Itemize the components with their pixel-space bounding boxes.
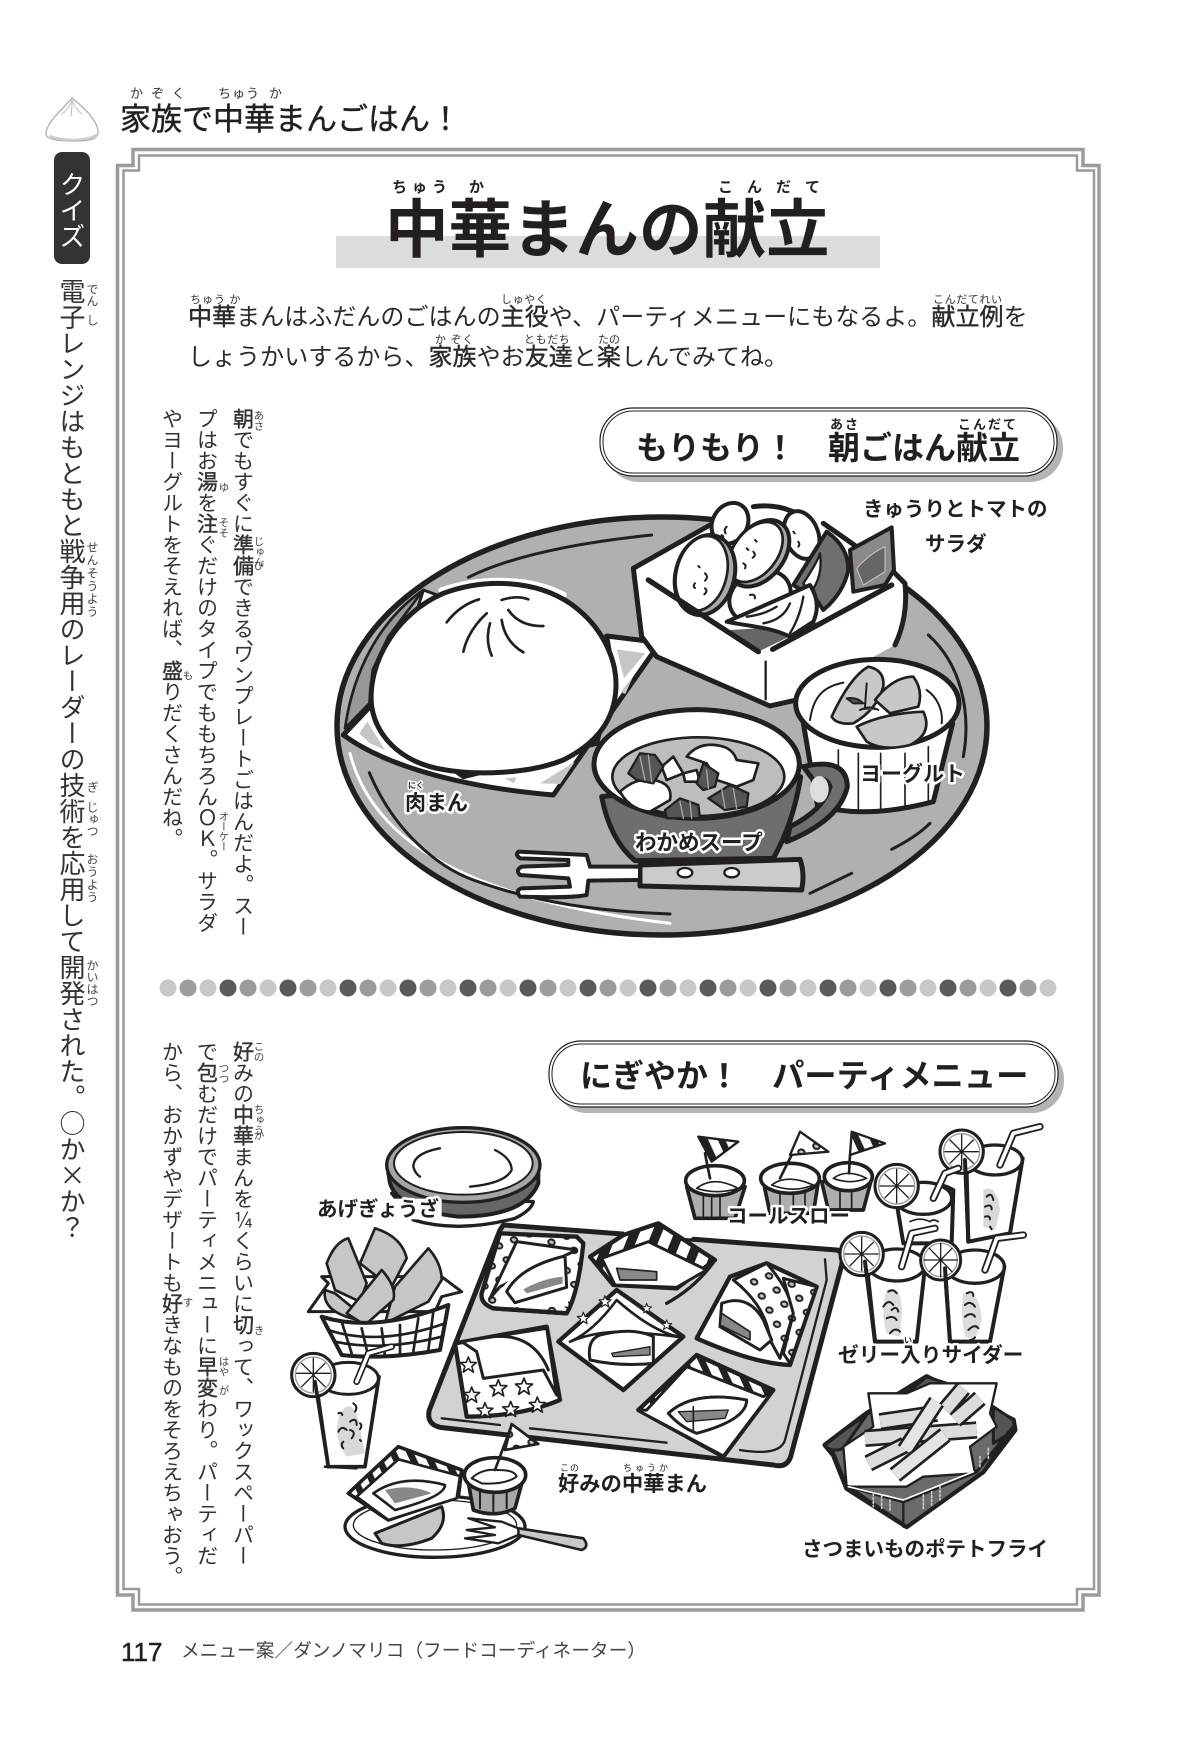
heading pill: party menu [549, 1041, 1064, 1113]
breakfast vertical text: オーケー [216, 811, 232, 851]
breakfast heading: こんだて [958, 414, 1018, 433]
intro text: しょうかいするから、家族やお友達と楽しんでみてね。 [188, 337, 788, 372]
dotted divider [160, 980, 1056, 996]
party vertical text: つつ [216, 1063, 232, 1084]
credit: メニュー案／ダンノマリコ（フードコーディネーター） [181, 1636, 646, 1663]
wrap D stars [558, 1290, 683, 1390]
party vertical text: き [252, 1325, 266, 1336]
breakfast vertical text: び [252, 560, 266, 570]
labels on plate: 肉まん [405, 787, 468, 817]
quiz vertical text: じゅつ [84, 801, 101, 837]
page number: 117 [121, 1637, 162, 1667]
party vertical text: この [252, 1041, 266, 1062]
illustration: party table: この [560, 1461, 580, 1474]
tray with wrapped buns [429, 1223, 842, 1466]
sweet potato fries basket [825, 1377, 1015, 1527]
running heading: かぞく [130, 83, 193, 102]
illustration: party table: ちゅうか [623, 1461, 671, 1474]
illustration: party table: 好みの中華まん [558, 1467, 707, 1498]
quiz vertical text: ぎ [84, 781, 101, 793]
running heading: 家族で中華まんごはん！ [120, 94, 461, 139]
illustration: breakfast plate: ヨーグルト [860, 758, 965, 788]
breakfast vertical text: やヨーグルトをそえれば、 盛 りだくさんだね。 [158, 408, 188, 849]
illustration: breakfast plate [337, 492, 1048, 935]
illustration: breakfast plate: わかめスープ [635, 826, 763, 857]
stacked plates and fried gyoza [308, 1128, 540, 1357]
main title: 中華まんの献立 [385, 179, 830, 271]
party vertical text: から、おかずやデザートも 好 きなものをそろえちゃおう。 [158, 1041, 188, 1587]
breakfast heading: もりもり！ [636, 423, 796, 469]
glass 1 [897, 1184, 953, 1243]
breakfast vertical text: じゅん [252, 536, 266, 568]
party vertical text: 好 みの 中華 まんを¼くらいに 切 って、ワックスペーパー [228, 1041, 258, 1566]
party vertical text: ちゅう [252, 1104, 266, 1136]
wrap A dots [481, 1233, 583, 1313]
quiz vertical text: おうよう [84, 853, 101, 903]
fork handle [640, 859, 803, 890]
fork head [517, 852, 640, 897]
intro text: こんだてれい [933, 291, 1003, 307]
party vertical text: が [216, 1385, 232, 1396]
main title: ちゅう か [392, 176, 489, 197]
illustration: party table: ゼリー入りサイダー [838, 1338, 1023, 1368]
glass 4 [945, 1256, 1004, 1342]
lemonade, side plate and dip [292, 1347, 586, 1557]
quiz vertical text: でん [84, 283, 101, 307]
plate [337, 517, 987, 935]
illustration: breakfast plate: きゅうりとトマトの [863, 492, 1048, 522]
breakfast heading [636, 414, 1020, 469]
intro text: 中華まんはふだんのごはんの主役や、パーティメニューにもなるよ。献立例を [188, 297, 1028, 332]
breakfast vertical text: 朝 でもすぐに 準備 できる 、 ワンプレートごはんだよ。スー [228, 408, 258, 937]
intro text: か ぞく [435, 331, 474, 347]
heading pill: breakfast menu [600, 408, 1063, 482]
wrap F stripes [638, 1355, 773, 1457]
illustration: breakfast plate: にく [408, 780, 424, 791]
illustration: party table [292, 1127, 1048, 1562]
intro text: しゅやく [501, 291, 547, 307]
salad dish, yogurt, soup and fork [594, 496, 966, 893]
quiz tag: クイズ [54, 171, 91, 249]
wrap C dots [697, 1263, 817, 1365]
party vertical text: か [252, 1130, 266, 1140]
quiz vertical text: し [84, 314, 101, 326]
quiz tag background [54, 152, 90, 264]
glass 2 [967, 1151, 1023, 1242]
intro text: ちゅう か [190, 291, 241, 307]
party vertical text: で 包 むだけでパーティメニューに 早変 わり。パーティだ [192, 1041, 222, 1566]
main title: こんだて [718, 176, 834, 197]
breakfast vertical text: ゆ [216, 482, 232, 492]
breakfast vertical text [158, 408, 266, 937]
breakfast vertical text: も [180, 670, 196, 680]
party vertical text [158, 1041, 266, 1587]
intro text: ともだち [524, 331, 570, 347]
illustration: party table: い [904, 1335, 912, 1346]
gyoza basket [308, 1277, 462, 1312]
running heading: ちゅう か [218, 83, 283, 102]
party heading [580, 1051, 1028, 1097]
party heading: パーティメニュー [772, 1051, 1028, 1097]
quiz vertical text: かいはつ [84, 959, 101, 1007]
wrap E stars [455, 1327, 560, 1417]
breakfast vertical text: そそ [216, 517, 232, 538]
title highlight bar [336, 236, 880, 268]
bun on wrapping paper [343, 535, 670, 923]
illustration: breakfast plate: サラダ [925, 527, 987, 557]
illustration: party table: コールスロー [727, 1199, 850, 1229]
quiz vertical text: 電子レンジはもともと戦争用のレーダーの技術を応用して開発された。○か×か？ [54, 278, 91, 1240]
soup cup [787, 764, 847, 842]
icon: steamed bun [46, 98, 98, 141]
breakfast vertical text: プはお 湯 を 注 ぐだけのタイプでももちろんＯＫ。サラダ [192, 408, 222, 933]
party heading: にぎやか！ [580, 1051, 740, 1097]
quiz vertical text: せんそうよう [84, 541, 101, 618]
breakfast heading: あさ [830, 414, 860, 433]
coleslaw cups and cider glasses [686, 1127, 1040, 1342]
decorative frame [118, 150, 1099, 1610]
party vertical text: す [180, 1297, 196, 1308]
breakfast heading: 朝ごはん献立 [828, 423, 1020, 469]
salad dish [633, 507, 905, 706]
wrap B stripes [590, 1223, 715, 1288]
yogurt [803, 723, 953, 812]
glass 3 [867, 1254, 925, 1342]
party vertical text: はや [216, 1356, 232, 1377]
intro text [188, 291, 1028, 372]
breakfast vertical text: あさ [252, 410, 266, 431]
illustration: party table: さつまいものポテトフライ [802, 1532, 1048, 1562]
labels on party table: あげぎょうざ [317, 1192, 439, 1222]
intro text: たの [598, 331, 620, 347]
